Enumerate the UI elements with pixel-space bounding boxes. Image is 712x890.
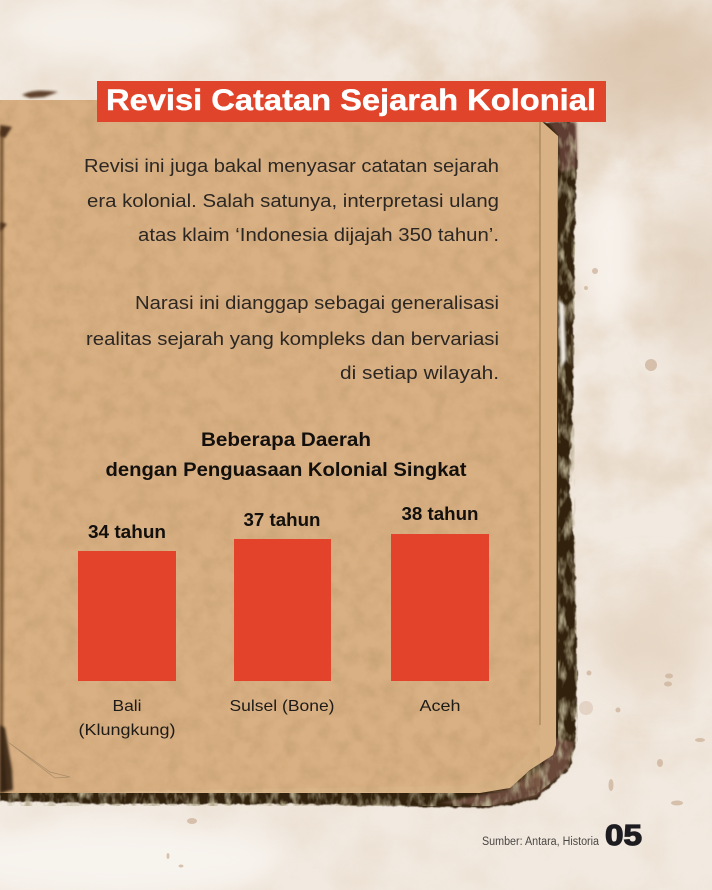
- bar: Aceh: [391, 504, 489, 715]
- book back page flap: [0, 118, 558, 793]
- text block: intro paragraph: era kolonial. Salah satunya, interpretasi ulang: [87, 191, 499, 211]
- chart heading: [106, 430, 467, 481]
- bar: Bali: [78, 522, 176, 739]
- bar: Aceh: Aceh: [420, 698, 460, 715]
- text block: second paragraph: di setiap wilayah.: [340, 363, 499, 383]
- spine scorch: [0, 130, 7, 793]
- bar: Sulsel (Bone): 37 tahun: [244, 510, 320, 530]
- bar: Bali: (Klungkung): [78, 722, 176, 739]
- text block: intro paragraph: Revisi ini juga bakal menyasar catatan sejarah: [84, 156, 499, 176]
- text block: intro paragraph: [84, 156, 499, 245]
- book main page: [0, 100, 540, 793]
- book: [0, 91, 580, 812]
- text block: intro paragraph: atas klaim ‘Indonesia dijajah 350 tahun’.: [138, 225, 499, 245]
- book dark cover edge: [0, 105, 577, 808]
- bar: Sulsel (Bone): [230, 510, 334, 715]
- text block: second paragraph: realitas sejarah yang kompleks dan bervariasi: [86, 329, 499, 349]
- bar: Aceh: 38 tahun: [402, 504, 478, 524]
- chart heading: Beberapa Daerah: [201, 430, 371, 451]
- bar: Sulsel (Bone): Sulsel (Bone): [230, 698, 334, 715]
- text block: second paragraph: Narasi ini dianggap sebagai generalisasi: [135, 293, 499, 313]
- text block: second paragraph: [86, 293, 499, 383]
- bar: Bali: Bali: [112, 698, 142, 715]
- title banner: Revisi Catatan Sejarah Kolonial: [106, 84, 596, 117]
- dog-ear crease: [8, 742, 70, 778]
- page number: 05: [605, 820, 642, 852]
- chart heading: dengan Penguasaan Kolonial Singkat: [106, 460, 467, 481]
- bar chart: [78, 504, 489, 739]
- source note: Sumber: Antara, Historia: [482, 836, 600, 848]
- bar: Bali: 34 tahun: [88, 522, 166, 542]
